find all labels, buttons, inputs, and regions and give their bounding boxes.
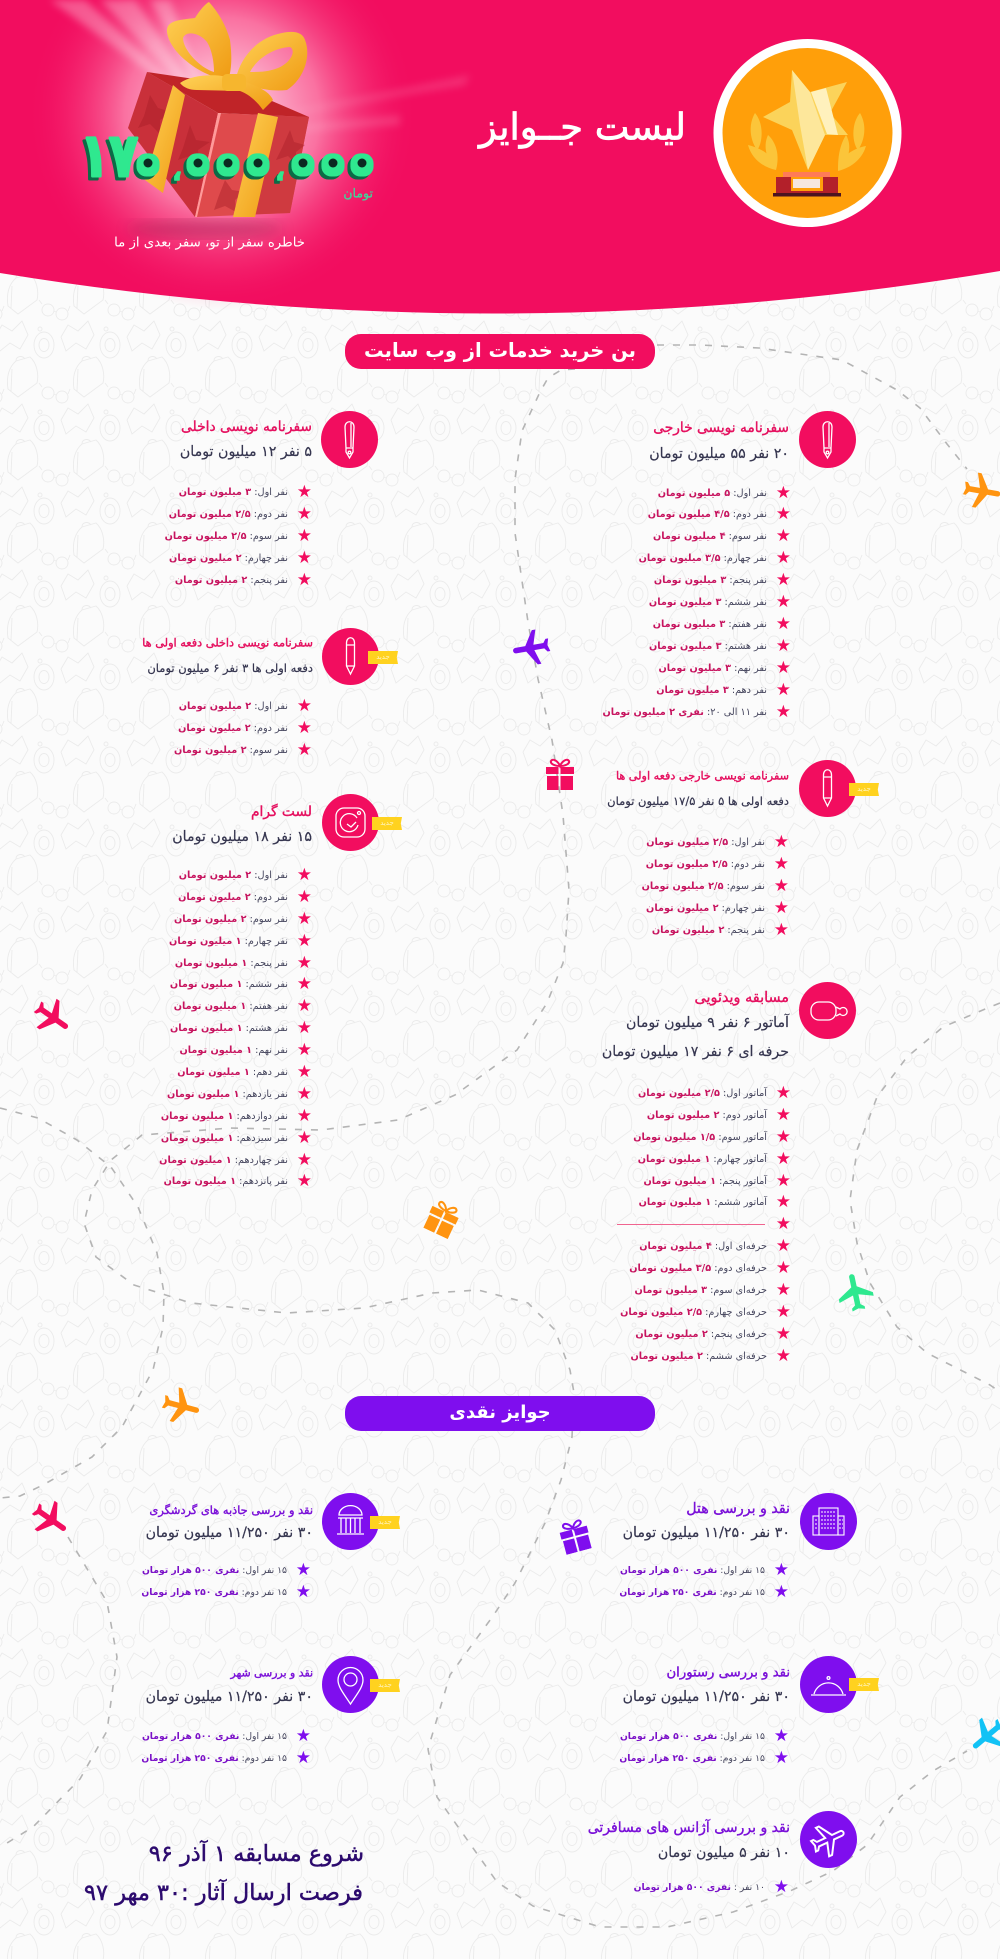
panel: city review (141, 1656, 400, 1768)
prize list: آماتور اول: ۲/۵ میلیون تومان (638, 1088, 767, 1099)
submission deadline: فرصت ارسال آثار :۳۰ مهر ۹۷ (84, 1880, 363, 1906)
new badge: جدید (378, 1518, 392, 1526)
prize list: نفر سیزدهم: ۱ میلیون تومان (161, 1133, 288, 1144)
prize list: نفر اول: ۵ میلیون تومان (658, 488, 767, 499)
panel: domestic travel writing: ★ (297, 548, 312, 568)
header band (0, 0, 1000, 314)
prize total figure: ۰ (252, 154, 264, 175)
prize list: آماتور پنجم: ۱ میلیون تومان (644, 1176, 767, 1187)
prize list: نفر هفتم: ۳ میلیون تومان (653, 619, 767, 630)
prize list: نفر پنجم: ۳ میلیون تومان (654, 575, 767, 586)
prize list: آماتور سوم: ۱/۵ میلیون تومان (633, 1132, 767, 1143)
prize list: نفر چهارم: ۲ میلیون تومان (169, 553, 288, 564)
panel: domestic first-timers: ★ (297, 718, 312, 738)
new badge (849, 783, 879, 796)
professional summary: حرفه ای ۶ نفر ۱۷ میلیون تومان (602, 1044, 789, 1060)
heading: لست گرام (251, 804, 312, 820)
icon: orange airplane center left (162, 1387, 200, 1422)
prize list: نفر ۱۱ الی ۲۰: نفری ۲ میلیون تومان (602, 706, 767, 718)
panel: video contest: ★ (776, 1149, 791, 1169)
panel: domestic first-timers: ★ (297, 740, 312, 760)
prize list: نفر دوم: ۲ میلیون تومان (178, 892, 288, 903)
prize list: نفر نهم: ۱ میلیون تومان (180, 1045, 288, 1056)
prize list: نفر پنجم: ۲ میلیون تومان (175, 575, 288, 586)
icon: gift box (128, 2, 309, 217)
prize summary: ۳۰ نفر ۱۱/۲۵۰ میلیون تومان (623, 1525, 790, 1541)
prize total figure: ۰ (356, 154, 368, 175)
prize total figure: ۰ (298, 154, 308, 175)
icon: trophy badge (714, 39, 902, 227)
prize list: نفر دوم: ۴/۵ میلیون تومان (648, 509, 767, 520)
icon: map pin (322, 1656, 379, 1713)
panel: foreign first-timers (607, 760, 879, 940)
currency label: تومان (343, 186, 373, 200)
section heading: website vouchers: بن خرید خدمات از وب سایت (364, 339, 636, 362)
panel: hotel review: ★ (774, 1560, 789, 1580)
panel: hotel review (619, 1493, 857, 1602)
section heading: website vouchers (345, 334, 655, 369)
icon: purple gift (560, 1519, 592, 1555)
icon: fountain pen (799, 411, 856, 468)
prize list: نفر ششم: ۱ میلیون تومان (170, 979, 288, 990)
prize list: نفر سوم: ۲/۵ میلیون تومان (165, 531, 288, 542)
title: لیست جــوایز (479, 106, 686, 148)
prize summary: ۱۰ نفر ۵ میلیون تومان (658, 1845, 790, 1861)
prize list: نفر دهم: ۱ میلیون تومان (177, 1067, 288, 1078)
new badge: جدید (380, 819, 394, 827)
panel: Lastgram: ★ (297, 1018, 312, 1038)
prize list: ۱۵ نفر دوم: نفری ۲۵۰ هزار تومان (619, 1587, 765, 1598)
heading: مسابقه ویدئویی (695, 990, 789, 1006)
panel: tourist attraction review: ★ (296, 1582, 311, 1602)
icon: purple airplane (513, 630, 550, 664)
prize list (174, 696, 312, 760)
prize list: نفر اول: ۳ میلیون تومان (179, 487, 288, 498)
icon: green airplane (838, 1274, 874, 1312)
panel: foreign travel writing: ★ (776, 702, 791, 722)
prize list: نفر دوازدهم: ۱ میلیون تومان (161, 1111, 288, 1122)
prize list: آماتور چهارم: ۱ میلیون تومان (638, 1154, 767, 1165)
section heading: cash prizes (345, 1396, 655, 1431)
prize list: نفر سوم: ۲ میلیون تومان (174, 914, 288, 925)
prize list: حرفه‌ای ششم: ۲ میلیون تومان (630, 1351, 767, 1362)
prize list: نفر هفتم: ۱ میلیون تومان (174, 1001, 288, 1012)
icon: pink gift (546, 758, 574, 790)
prize list: نفر چهاردهم: ۱ میلیون تومان (159, 1155, 288, 1166)
panel: tourist attraction review (141, 1493, 400, 1602)
icon: orange airplane top right (963, 472, 1000, 508)
prize list: حرفه‌ای پنجم: ۲ میلیون تومان (635, 1329, 767, 1340)
contest start date: شروع مسابقه ۱ آذر ۹۶ (149, 1841, 364, 1867)
icon: pink airplane upper left (34, 998, 68, 1030)
icon: hotel (800, 1493, 857, 1550)
icon: video camera (799, 982, 856, 1039)
prize list: آماتور ششم: ۱ میلیون تومان (639, 1197, 767, 1208)
new badge: جدید (857, 785, 871, 793)
new badge (370, 1516, 400, 1529)
prize list: نفر سوم: ۲/۵ میلیون تومان (642, 881, 765, 892)
panel: video contest: ★ (776, 1127, 791, 1147)
prize list: نفر یازدهم: ۱ میلیون تومان (167, 1089, 288, 1100)
panel: video contest: ★ (776, 1346, 791, 1366)
prize list: ۱۰ نفر : نفری ۵۰۰ هزار تومان (634, 1882, 765, 1893)
icon: pencil (799, 760, 856, 817)
prize list: نفر دهم: ۳ میلیون تومان (656, 685, 767, 696)
panel: Lastgram (159, 794, 402, 1191)
panel: restaurant review: ★ (774, 1748, 789, 1768)
panel: domestic travel writing: ★ (297, 504, 312, 524)
new badge (849, 1678, 879, 1691)
icon: pencil (322, 628, 379, 685)
panel: foreign travel writing (602, 411, 856, 722)
prize list (619, 1726, 789, 1768)
prize list: حرفه‌ای دوم: ۳/۵ میلیون تومان (629, 1263, 767, 1274)
panel: Lastgram: ★ (297, 909, 312, 929)
heading: نقد و بررسی جاذبه های گردشگری (149, 1503, 313, 1517)
prize total figure: ۰ (222, 154, 234, 175)
prize list: حرفه‌ای چهارم: ۲/۵ میلیون تومان (620, 1307, 767, 1318)
panel: domestic travel writing: ★ (297, 526, 312, 546)
icon: pink airplane lower left (32, 1500, 66, 1532)
panel: video contest: ★ (776, 1171, 791, 1191)
panel: video contest: ★ (776, 1258, 791, 1278)
icon: columned monument (322, 1493, 379, 1550)
panel: video contest: ★ (776, 1280, 791, 1300)
prize list (617, 1083, 791, 1366)
panel: foreign travel writing: ★ (776, 570, 791, 590)
new badge (372, 817, 402, 830)
panel: Lastgram: ★ (297, 1171, 312, 1191)
panel: hotel review: ★ (774, 1582, 789, 1602)
prize summary: ۱۵ نفر ۱۸ میلیون تومان (172, 829, 312, 845)
prize list (602, 483, 791, 722)
prize list: نفر سوم: ۴ میلیون تومان (653, 531, 767, 542)
panel: travel agency review: ★ (774, 1877, 789, 1897)
prize summary: دفعه اولی ها ۵ نفر ۱۷/۵ میلیون تومان (607, 794, 789, 808)
new badge (368, 651, 398, 664)
panel: Lastgram: ★ (297, 1040, 312, 1060)
panel: Lastgram: ★ (297, 1084, 312, 1104)
panel: domestic first-timers: ★ (297, 696, 312, 716)
panel: Lastgram: ★ (297, 865, 312, 885)
panel: Lastgram: ★ (297, 887, 312, 907)
prize list: نفر نهم: ۳ میلیون تومان (659, 663, 767, 674)
new badge (370, 1679, 400, 1692)
prize list: نفر پنجم: ۱ میلیون تومان (175, 958, 288, 969)
panel: foreign travel writing: ★ (776, 483, 791, 503)
prize summary: ۳۰ نفر ۱۱/۲۵۰ میلیون تومان (146, 1525, 313, 1541)
prize summary: دفعه اولی ها ۳ نفر ۶ میلیون تومان (147, 661, 313, 675)
panel: restaurant review (619, 1656, 879, 1768)
panel: Lastgram: ★ (297, 1106, 312, 1126)
panel: video contest: ★ (776, 1105, 791, 1125)
panel: domestic travel writing: ★ (297, 482, 312, 502)
prize list: نفر پانزدهم: ۱ میلیون تومان (164, 1176, 288, 1187)
prize list (141, 1560, 311, 1602)
prize summary: ۳۰ نفر ۱۱/۲۵۰ میلیون تومان (146, 1688, 313, 1704)
prize total figure: ۰ (192, 154, 204, 175)
new badge: جدید (857, 1680, 871, 1688)
panel: Lastgram: ★ (297, 1062, 312, 1082)
prize list: ۱۵ نفر دوم: نفری ۲۵۰ هزار تومان (141, 1587, 287, 1598)
prize list: حرفه‌ای اول: ۴ میلیون تومان (639, 1241, 767, 1252)
panel: tourist attraction review: ★ (296, 1560, 311, 1580)
panel: foreign travel writing: ★ (776, 548, 791, 568)
prize list: ۱۵ نفر اول: نفری ۵۰۰ هزار تومان (142, 1731, 287, 1742)
prize list: ۱۵ نفر اول: نفری ۵۰۰ هزار تومان (620, 1731, 765, 1742)
panel: Lastgram: ★ (297, 1128, 312, 1148)
heading: سفرنامه نویسی خارجی (653, 420, 789, 436)
prize list: نفر چهارم: ۳/۵ میلیون تومان (639, 553, 767, 564)
amateur summary: آماتور ۶ نفر ۹ میلیون تومان (626, 1015, 789, 1031)
prize list (141, 1726, 311, 1768)
prize summary: ۲۰ نفر ۵۵ میلیون تومان (649, 446, 789, 462)
heading: سفرنامه نویسی داخلی (181, 419, 312, 435)
panel: Lastgram: ★ (297, 931, 312, 951)
panel: travel agency review (588, 1811, 857, 1897)
prize summary: ۳۰ نفر ۱۱/۲۵۰ میلیون تومان (623, 1688, 790, 1704)
panel: foreign travel writing: ★ (776, 636, 791, 656)
icon: orange gift (424, 1200, 459, 1239)
new badge: جدید (378, 1681, 392, 1689)
prize list: آماتور دوم: ۲ میلیون تومان (647, 1110, 767, 1121)
prize total figure: ، (275, 158, 285, 186)
panel: Lastgram: ★ (297, 953, 312, 973)
icon: serving dome (800, 1656, 857, 1713)
panel: foreign first-timers: ★ (774, 854, 789, 874)
heading: نقد و بررسی آژانس های مسافرتی (588, 1820, 790, 1836)
prize list: نفر هشتم: ۱ میلیون تومان (170, 1023, 288, 1034)
prize summary: ۵ نفر ۱۲ میلیون تومان (180, 444, 312, 460)
panel: domestic travel writing (165, 411, 378, 590)
icon: fountain pen (321, 411, 378, 468)
prize list (634, 1877, 789, 1897)
heading: سفرنامه نویسی خارجی دفعه اولی ها (616, 770, 789, 783)
prize list: نفر سوم: ۲ میلیون تومان (174, 745, 288, 756)
prize total figure: ، (172, 158, 182, 186)
prize list: نفر ششم: ۳ میلیون تومان (649, 597, 767, 608)
prize list: حرفه‌ای سوم: ۳ میلیون تومان (635, 1285, 767, 1296)
panel: foreign first-timers: ★ (774, 832, 789, 852)
panel: foreign first-timers: ★ (774, 876, 789, 896)
tagline: خاطره سفر از تو، سفر بعدی از ما (114, 236, 305, 250)
prize total figure (80, 125, 374, 190)
panel: city review: ★ (296, 1748, 311, 1768)
heading: نقد و بررسی رستوران (666, 1665, 790, 1680)
prize list (165, 482, 312, 590)
prize list: ۱۵ نفر دوم: نفری ۲۵۰ هزار تومان (619, 1753, 765, 1764)
panel: video contest: ★ (776, 1192, 791, 1212)
panel: restaurant review: ★ (774, 1726, 789, 1746)
prize list: ۱۵ نفر اول: نفری ۵۰۰ هزار تومان (620, 1565, 765, 1576)
section heading: cash prizes: جوایز نقدی (449, 1402, 551, 1423)
prize list: نفر اول: ۲/۵ میلیون تومان (646, 837, 765, 848)
prize list: نفر اول: ۲ میلیون تومان (179, 870, 288, 881)
panel: foreign travel writing: ★ (776, 614, 791, 634)
prize list: ۱۵ نفر اول: نفری ۵۰۰ هزار تومان (142, 1565, 287, 1576)
prize list: نفر پنجم: ۲ میلیون تومان (652, 925, 765, 936)
panel: foreign travel writing: ★ (776, 592, 791, 612)
panel: video contest (602, 982, 856, 1366)
icon: airplane outline (800, 1811, 857, 1868)
panel: video contest: ★ (776, 1083, 791, 1103)
prize list: نفر دوم: ۲/۵ میلیون تومان (169, 509, 288, 520)
prize total figure: ۰ (142, 154, 154, 175)
panel: Lastgram: ★ (297, 1150, 312, 1170)
panel: foreign travel writing: ★ (776, 658, 791, 678)
prize list (642, 832, 789, 940)
panel: foreign first-timers: ★ (774, 920, 789, 940)
panel: foreign travel writing: ★ (776, 680, 791, 700)
prize list: نفر دوم: ۲ میلیون تومان (178, 723, 288, 734)
panel: city review: ★ (296, 1726, 311, 1746)
panel: foreign first-timers: ★ (774, 898, 789, 918)
icon: Instagram frame (322, 794, 379, 851)
prize total figure: ۰ (328, 154, 338, 175)
prize list: نفر هشتم: ۳ میلیون تومان (649, 641, 767, 652)
heading: نقد و بررسی شهر (230, 1666, 313, 1680)
panel: video contest: ★ (776, 1324, 791, 1344)
icon: blue airplane (972, 1718, 1000, 1748)
panel: foreign travel writing: ★ (776, 526, 791, 546)
prize list (159, 865, 312, 1191)
panel: foreign travel writing: ★ (776, 504, 791, 524)
panel: domestic travel writing: ★ (297, 570, 312, 590)
panel: video contest: ★ (776, 1214, 791, 1234)
panel: video contest: ★ (776, 1302, 791, 1322)
panel: video contest: ★ (776, 1236, 791, 1256)
prize list: نفر اول: ۲ میلیون تومان (179, 701, 288, 712)
prize list: نفر چهارم: ۱ میلیون تومان (169, 936, 288, 947)
new badge: جدید (376, 653, 390, 661)
panel: Lastgram: ★ (297, 996, 312, 1016)
prize list (619, 1560, 789, 1602)
prize list: ۱۵ نفر دوم: نفری ۲۵۰ هزار تومان (141, 1753, 287, 1764)
panel: domestic first-timers (142, 628, 398, 760)
prize list: نفر چهارم: ۲ میلیون تومان (646, 903, 765, 914)
heading: سفرنامه نویسی داخلی دفعه اولی ها (142, 636, 313, 650)
heading: نقد و بررسی هتل (686, 1501, 790, 1517)
prize list: نفر دوم: ۲/۵ میلیون تومان (646, 859, 765, 870)
panel: Lastgram: ★ (297, 974, 312, 994)
